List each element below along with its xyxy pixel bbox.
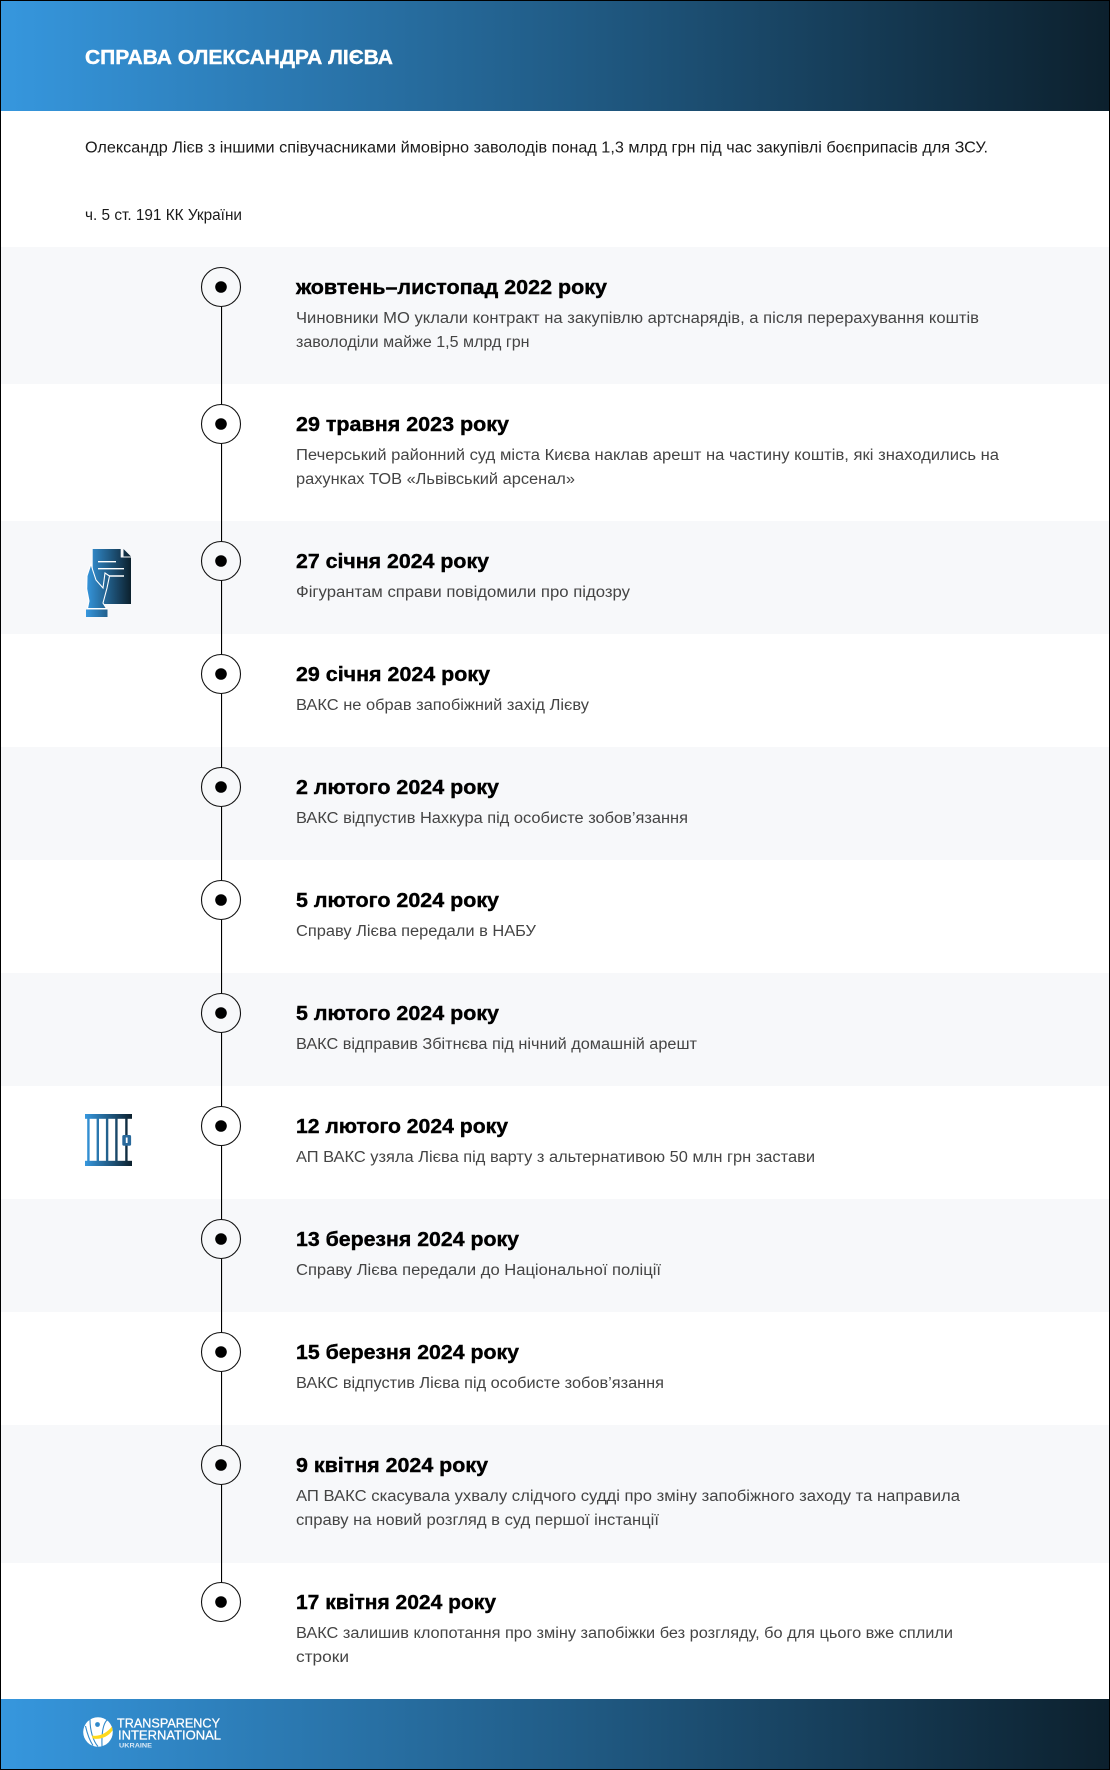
marker [202, 404, 240, 444]
marker [202, 268, 240, 306]
logo wordmark: TRANSPARENCY [117, 1716, 221, 1730]
event 4 [202, 654, 589, 714]
logo wordmark [117, 1716, 221, 1750]
logo emblem [83, 1717, 113, 1747]
marker [202, 1106, 240, 1146]
event 9 [202, 1220, 662, 1279]
marker [202, 1220, 240, 1258]
marker [202, 1446, 240, 1484]
timeline line [221, 287, 222, 1602]
title: СПРАВА ОЛЕКСАНДРА ЛІЄВА [85, 46, 393, 69]
marker [202, 542, 240, 580]
date: жовтень–листопад 2022 року [295, 276, 608, 299]
description: справу на новий розгляд в суд першої інстанції [296, 1512, 660, 1529]
date: 17 квітня 2024 року [296, 1591, 497, 1614]
date: 2 лютого 2024 року [296, 776, 500, 799]
date: 29 травня 2023 року [296, 413, 510, 436]
event 10 [202, 1332, 664, 1392]
description: заволоділи майже 1,5 млрд грн [296, 334, 530, 351]
description: Чиновники МО уклали контракт на закупівлю артснарядів, а після перерахування коштів [296, 310, 979, 327]
description: Справу Лієва передали до Національної поліції [296, 1262, 662, 1279]
date: 5 лютого 2024 року [296, 1002, 500, 1025]
date: 12 лютого 2024 року [296, 1115, 509, 1138]
description: АП ВАКС скасувала ухвалу слідчого судді про зміну запобіжного заходу та направила [296, 1488, 960, 1505]
alternating row backgrounds [0, 247, 1110, 1563]
marker [202, 880, 240, 920]
description: рахунках ТОВ «Львівський арсенал» [296, 471, 575, 488]
description [296, 1625, 953, 1666]
event 12 [202, 1582, 953, 1666]
description: Печерський районний суд міста Києва наклав арешт на частину коштів, які знаходились на [296, 447, 999, 464]
footer banner [0, 1699, 1110, 1770]
event 7 [202, 994, 697, 1053]
date: 15 березня 2024 року [296, 1341, 520, 1364]
event 6 [202, 880, 536, 940]
date: 27 січня 2024 року [296, 550, 490, 573]
event 8 [85, 1106, 815, 1166]
marker [202, 1582, 240, 1622]
description: ВАКС відпустив Лієва під особисте зобов’язання [296, 1375, 664, 1392]
event 11 [202, 1446, 960, 1529]
event 5 [202, 768, 688, 827]
date: 13 березня 2024 року [296, 1228, 520, 1251]
description [296, 310, 979, 351]
icon: hand holding document [86, 549, 131, 617]
marker [202, 654, 240, 694]
event 1 [202, 268, 979, 351]
logo wordmark: INTERNATIONAL [118, 1728, 221, 1742]
marker [202, 768, 240, 806]
legal article text: ч. 5 ст. 191 КК України [85, 207, 242, 224]
description [296, 447, 999, 488]
description: ВАКС відправив Збітнєва під нічний домашній арешт [296, 1036, 697, 1053]
description: Справу Лієва передали в НАБУ [296, 923, 536, 940]
event 3 [86, 542, 630, 617]
description [296, 1488, 960, 1529]
description: ВАКС не обрав запобіжний захід Лієву [296, 697, 589, 714]
marker [202, 994, 240, 1032]
description: АП ВАКС узяла Лієва під варту з альтернативою 50 млн грн застави [296, 1149, 815, 1166]
icon: prison bars [85, 1114, 132, 1166]
marker [202, 1332, 240, 1372]
logo: Transparency International Ukraine [83, 1716, 221, 1750]
date: 29 січня 2024 року [296, 663, 491, 686]
date: 9 квітня 2024 року [296, 1454, 489, 1477]
description: ВАКС залишив клопотання про зміну запобіжки без розгляду, бо для цього вже сплили [296, 1625, 953, 1642]
intro text: Олександр Лієв з іншими співучасниками ймовірно заволодів понад 1,3 млрд грн під час закупівлі боєприпасів для ЗСУ. [85, 140, 988, 156]
description: строки [296, 1649, 349, 1666]
header banner [0, 0, 1110, 111]
date: 5 лютого 2024 року [296, 889, 500, 912]
description: Фігурантам справи повідомили про підозру [296, 584, 630, 601]
logo wordmark: UKRAINE [119, 1744, 152, 1750]
description: ВАКС відпустив Нахкура під особисте зобов’язання [296, 810, 688, 827]
event 2 [202, 404, 999, 488]
